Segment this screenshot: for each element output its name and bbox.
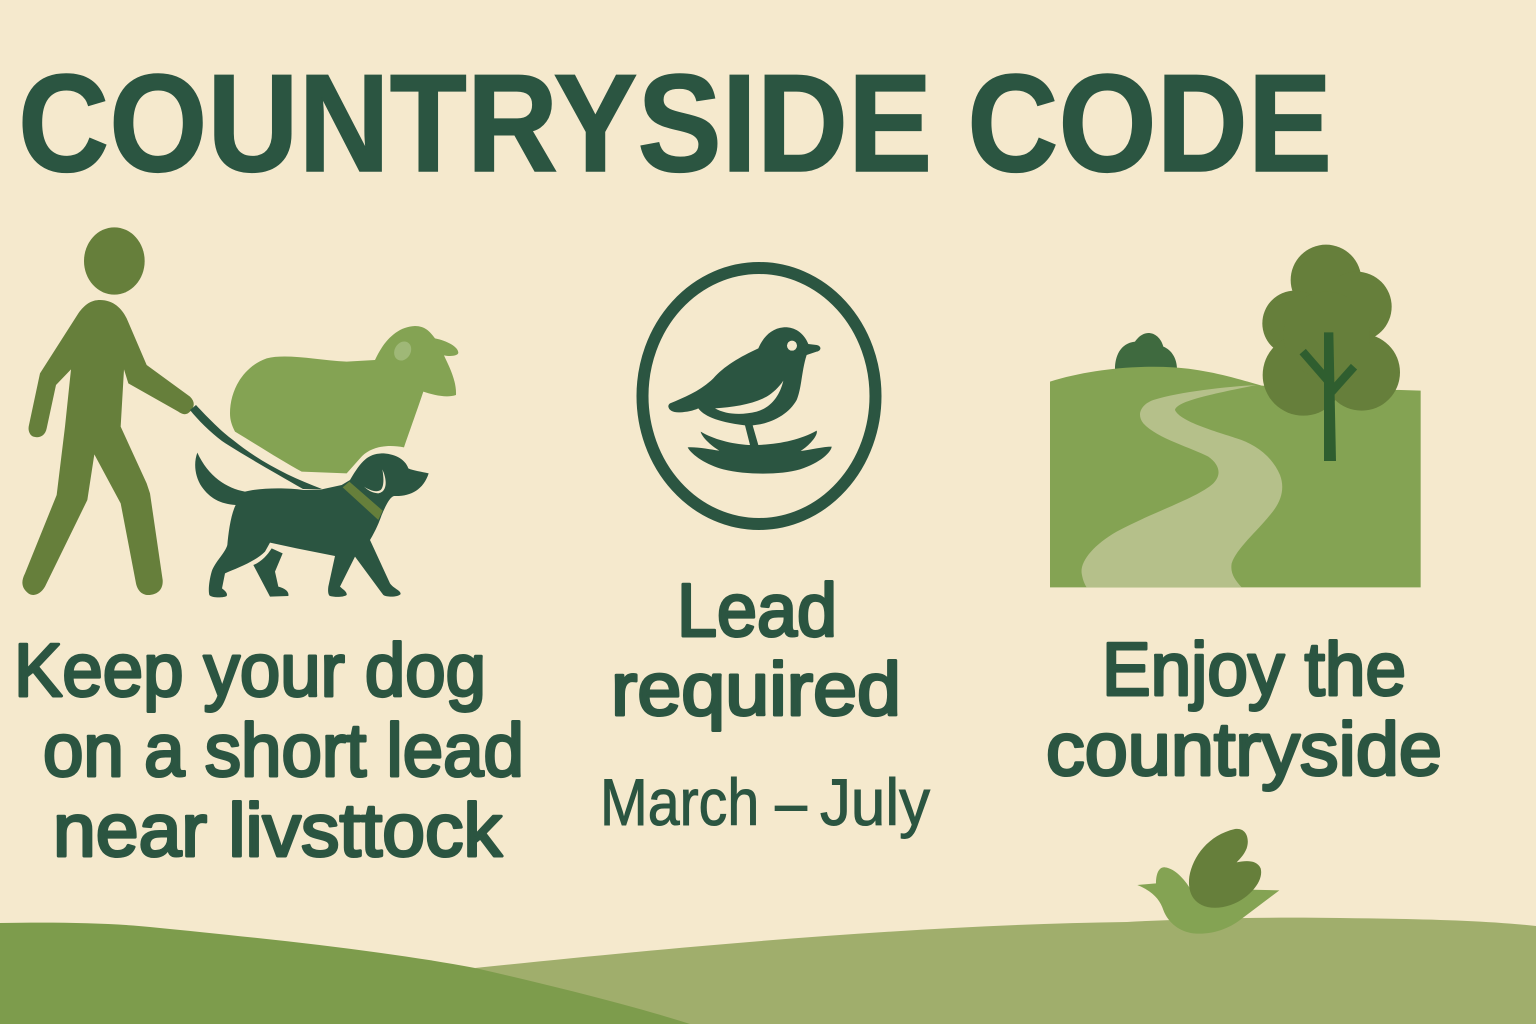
dog xyxy=(195,453,429,597)
caption: keep your dog on a short lead: Keep your dog xyxy=(14,628,486,712)
caption: keep your dog on a short lead: on a short lead xyxy=(43,708,524,792)
caption: enjoy the countryside: Enjoy the xyxy=(1102,627,1406,711)
title: COUNTRYSIDE CODE xyxy=(18,46,1332,201)
icon: flying bird xyxy=(1137,829,1279,934)
winding path xyxy=(1082,385,1282,587)
icon: landscape with path and tree xyxy=(1050,245,1421,587)
sheep xyxy=(230,326,458,473)
caption: keep your dog on a short lead: near livsttock xyxy=(53,788,502,872)
leash xyxy=(190,405,322,489)
caption: date range: March – xyxy=(600,765,807,839)
nest xyxy=(688,431,832,474)
caption: keep your dog on a short lead xyxy=(14,628,524,872)
caption: lead required: required xyxy=(611,647,901,731)
bird body xyxy=(1137,867,1279,934)
hill xyxy=(1050,367,1421,587)
caption: date range: July xyxy=(820,765,930,839)
bush xyxy=(1115,333,1177,369)
caption: lead required xyxy=(611,568,901,731)
tree xyxy=(1262,245,1400,461)
person xyxy=(22,227,194,595)
front hill xyxy=(0,923,690,1024)
oval ring xyxy=(642,268,876,524)
icon: person walking dog near sheep xyxy=(22,227,458,597)
back hill xyxy=(475,918,1536,1024)
bird xyxy=(668,327,820,445)
bird wing xyxy=(1189,829,1261,908)
icon: nesting bird in oval xyxy=(642,268,876,524)
caption: lead required: Lead xyxy=(677,568,837,652)
caption: enjoy the countryside xyxy=(1046,627,1442,791)
caption: enjoy the countryside: countryside xyxy=(1046,707,1442,791)
